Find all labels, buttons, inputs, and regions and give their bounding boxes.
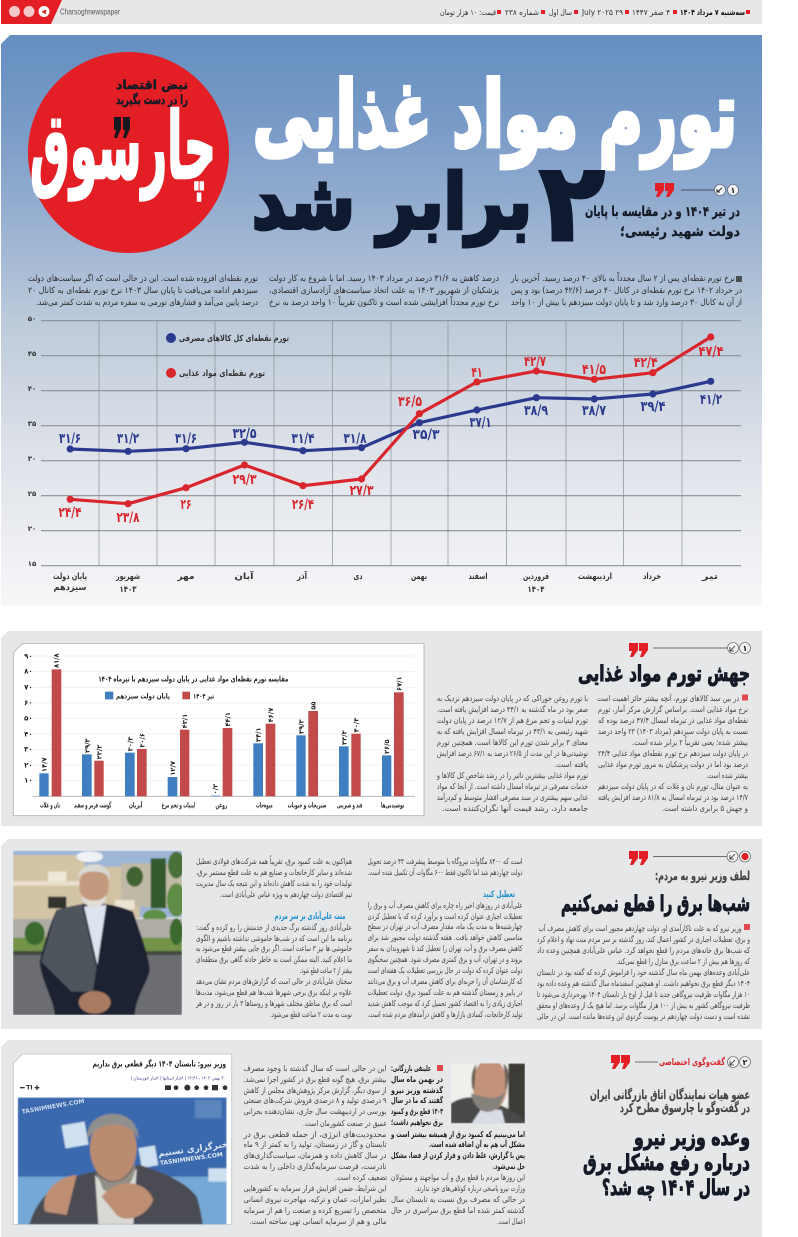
legend: تورم نقطه‌ای مواد غذایی [179, 369, 265, 379]
series: overall inflation: ۳۸/۷ [582, 403, 606, 419]
series: food inflation: ۴۱ [472, 365, 482, 381]
red social tab [1, 0, 62, 24]
series: overall inflation: ۳۲/۵ [232, 426, 257, 442]
section marker [611, 1055, 750, 1069]
issue date line: سال اول [549, 8, 572, 17]
bar value labels: ۳۴/۱ [255, 727, 263, 742]
x axis labels: اسفند [468, 572, 488, 582]
x axis labels: ۱۴۰۳ [120, 585, 137, 595]
bar chart legend: تیر ۱۴۰۴ [193, 692, 214, 700]
logo tagline: نبض اقتصاد [116, 77, 188, 92]
intro text columns: نرخ تورم نقطه‌ای پس از ۲ سال مجدداً به بالای ۴۰ درصد رسید. آخرین بار [510, 271, 735, 284]
panel: lead story with line chart [1, 35, 762, 606]
bar value labels: ۸۱/۸ [53, 653, 61, 668]
issue date line: شماره ۲۳۸ [505, 8, 539, 17]
interview text: اما می‌بینیم که کمبود برق از همیشه بیشتر است و [390, 1130, 525, 1139]
screenshot meta line: ۳۰ بهمن ۱۴۰۳ - ۱۲:۴۶ | اخبار استانها | اخبار خوزستان | [131, 1075, 226, 1081]
intro text columns [28, 271, 742, 308]
headline line two: برابر شد [252, 157, 532, 247]
article text right column: ۱۴/۷ درصد بود در تیرماه امسال به ۸۱/۸ درصد افزایش یافته [598, 793, 749, 802]
series: food inflation: ۴۷/۴ [698, 344, 724, 360]
logo tagline: را در دست بگیرید [116, 92, 188, 107]
bar chart y axis: ۸۰ [24, 668, 33, 676]
interview text: پس با گزارش، غلط دادن و فرار کردن از فضا، مشکل [391, 1150, 525, 1161]
series: overall inflation: ۴۱/۲ [700, 392, 722, 408]
photo: minister outside building [13, 851, 186, 1015]
article text right column: و جهش ۵ برابری داشته است. [662, 804, 748, 813]
bar category labels: روغن [215, 801, 227, 809]
headline line two: ۲ [539, 141, 605, 266]
article text left column: این در حالی است که سال گذشته با وجود مصرف [244, 1063, 386, 1073]
article text left column: متخصص را تسریع کرده و صنعت را هم از سرمایه [244, 1206, 386, 1215]
interview text: علینقی بازرگانی: [391, 1063, 431, 1073]
section marker: ۱ [743, 644, 747, 653]
article text middle column: بروند و در تهران، آب و برق کمتری مصرف شود. همچنین سخنگوی [368, 954, 522, 964]
photo: minister at press backdrop [18, 1097, 229, 1225]
section marker: ۱ [731, 186, 735, 195]
article text left column: برنامه ما این است که در شب‌ها خاموشی نداشته باشیم و الگوی [196, 933, 352, 943]
article text left column: عمیق در صنعت کشورمان است. [303, 1119, 387, 1128]
article text middle column [367, 856, 523, 1019]
bar chart y axis: ۱۰ [24, 777, 33, 785]
article text left column: بورسی در اردیبهشت سال جاری، نشان‌دهنده بحرانی [244, 1107, 386, 1116]
article text left column: تورم لبنیات و تخم مرغ هم از ۱۲/۷ درصد در پایان دولت [437, 716, 588, 725]
series: overall inflation: ۳۱/۴ [292, 431, 315, 447]
bars: end of 13th government [39, 735, 391, 796]
article text left column: تورم مواد غذایی بیشترین تاثیر را در رشد شاخص کل کالاها و [436, 771, 588, 780]
interview text [390, 1059, 525, 1226]
bar category labels: گوشت قرمز و سفید [74, 800, 112, 809]
article text right column: در پایان دولت سیزدهم نرخ تورم نقطه‌ای مواد غذایی ۲۴/۴ [598, 749, 748, 758]
x axis labels: فروردین [523, 572, 549, 582]
series: food inflation: ۲۶ [180, 497, 192, 513]
interview text: ۱۴۰۴ قطع برق و کمبود [391, 1107, 443, 1116]
bar value labels: ۳۹/۳ [297, 719, 305, 734]
kicker [590, 1087, 750, 1115]
series: food inflation: ۴۱/۵ [582, 362, 606, 378]
article text left column: غذایی سهم بیشتری در سبد مصرفی اقشار متوسط و کم‌درآمد [437, 792, 588, 802]
issue date line: قیمت: ۱۰ هزار تومان [440, 8, 496, 17]
article text left column: تضعیف کرده است. [335, 1173, 387, 1182]
article text middle column: که کارشناسان آن را حربه‌ای برای کاهش مصرف آب و برق می‌دانند [368, 976, 523, 986]
bar value labels: ۴۳/۱ [181, 714, 189, 728]
y axis labels: ۳۰ [28, 455, 36, 463]
article text left column: علاوه بر اینکه برق برخی شهرها شب‌ها هم قطع می‌شود، مدت‌ها [196, 988, 352, 997]
issue date line [440, 8, 750, 17]
bar chart legend: پایان دولت سیزدهم [116, 692, 170, 700]
article text left column: تیم اقتصادی دولت چهاردهم به ویژه عباس علی‌آبادی است. [220, 889, 352, 899]
logo quote mark [114, 117, 130, 138]
article text left column: علی‌آبادی روز گذشته برگ جدیدی از خدمتش را رو کرده و گفت: [196, 922, 352, 932]
section marker [655, 183, 738, 197]
interview text: گفتند که ما در سال [391, 1095, 443, 1105]
photo backdrop wording: خبرگزاری تسنیم [157, 1139, 229, 1160]
intro text columns: نرخ تورم مجدداً افزایشی شده است و تاکنون تقریباً ۱۰ واحد درصد به نرخ [269, 295, 499, 308]
article text right column [537, 923, 750, 1021]
bar value labels: ۱۴/۷ [40, 757, 48, 772]
bar category labels: آبزیان [129, 800, 143, 809]
x axis labels: آبان [234, 570, 255, 582]
article text left column: در سال کاهش داده و همزمان، سیاست‌گذاری‌های [244, 1150, 387, 1160]
x axis labels: آذر [296, 570, 308, 582]
article text left column: هم‌اکنون به علت کمبود برق، تقریباً همه شرکت‌های فولادی تعطیل [196, 855, 352, 866]
issue date line: سه‌شنبه ۷ مرداد ۱۴۰۴ [680, 8, 745, 17]
interview text: گذشته وزیر نیرو [390, 1085, 443, 1095]
bar value labels: ۴۶/۷ [267, 708, 275, 722]
section marker: ۲ [743, 1058, 748, 1067]
intro text columns: درصد کاهش به ۳۱/۶ درصد در مرداد ۱۴۰۳ رسید. اما با شروع به کار دولت [269, 274, 499, 284]
x axis labels: شهریور [115, 572, 140, 582]
article text middle column: تعطیل کنید [483, 890, 515, 900]
bar value labels: ۳۰/۶ [138, 733, 146, 748]
subheading: دولت شهید رئیسی؛ [620, 224, 740, 240]
intro text columns: سیزدهم ادامه می‌یافت تا پایان سال ۱۴۰۳ نرخ تورم نقطه‌ای به کانال ۲۰ [28, 286, 258, 296]
bar category labels: لبنیات و تخم مرغ [162, 801, 195, 809]
article text left column [436, 694, 588, 813]
bar value labels: ۵۵ [310, 702, 318, 710]
y axis labels: ۴۰ [28, 385, 36, 393]
interview text: در حالی که مصرف برق نسبت به تابستان سال [391, 1195, 525, 1204]
subheading: در تیر ۱۴۰۴ و در مقایسه با پایان [585, 204, 740, 220]
x axis labels: تیر [701, 572, 718, 582]
article text left column: شده‌اند و سایر کارخانجات و صنایع هم به علت قطع مستمر برق، [196, 868, 352, 877]
y axis labels: ۱۵ [28, 560, 37, 568]
panel: energy minister story [1, 839, 762, 1029]
article text right column [597, 693, 749, 813]
article text left column [195, 855, 352, 1019]
bar value labels: ۳۰/۳ [126, 737, 134, 751]
article text left column: بیشتر از ۲ ساعت قطع شود. [300, 966, 352, 975]
series: overall inflation [59, 378, 722, 455]
issue date line: ۲۹ July ۲۰۲۵ [581, 8, 623, 17]
article text left column: محدودیت‌های انرژی، از جمله قطعی برق در [243, 1130, 386, 1139]
bar chart y axis: ۵۰ [24, 715, 33, 723]
bar category labels: سبزیجات و حبوبات [288, 801, 326, 809]
bar chart y axis: ۶۰ [24, 699, 33, 707]
article text left column: خدمات مصرفی در تیرماه امسال داشته است. از آنجا که مواد [437, 781, 588, 791]
series: food inflation: ۲۶/۴ [292, 497, 314, 513]
article text left column: بیشتر برق، هیچ گونه قطع برق در کشور اجرا نمی‌شد. [244, 1074, 386, 1084]
article text left column: یافته است. [554, 760, 588, 769]
panel: exclusive interview [1, 1040, 762, 1237]
article text left column: تابستان و گاز در زمستان، تولید را به کمتر از ۹ ماه [244, 1139, 386, 1149]
bar chart title: مقایسه تورم نقطه‌ای مواد غذایی در پایان دولت سیزدهم با تیرماه ۱۴۰۴ [98, 675, 289, 684]
photo backdrop wording: TASNIMNEWS.COM [21, 1098, 85, 1116]
intro text columns: در خرداد ۱۴۰۲ نرخ تورم نقطه‌ای در کانال ۴۰ درصد (۴۲/۶ درصد) بود و پس [511, 286, 742, 296]
legend: تورم نقطه‌ای کل کالاهای مصرفی [179, 334, 289, 344]
article text right column: بیشتر شده است. [706, 771, 748, 780]
intro text columns: پزشکیان از شهریور ۱۴۰۳ به علت اتخاذ سیاست‌های آزادسازی اقتصادی، [269, 284, 500, 296]
series: overall inflation: ۳۱/۸ [344, 431, 367, 447]
bars: Tir 1404 [52, 669, 404, 796]
newspaper handle: Charsoghnewspaper [60, 8, 120, 16]
interview text: مشکل آب هم به آن اضافه شده است. [429, 1139, 525, 1149]
article text left column: ۹ درصدی تولید و ۸ درصدی فروش شرکت‌های صنعتی [244, 1096, 386, 1105]
news site screenshot card [13, 1054, 232, 1225]
x axis labels: مهر [176, 572, 194, 582]
issue date line: ۴ صفر ۱۴۴۷ [632, 8, 670, 17]
bar category labels: قند و شیرینی [337, 801, 363, 809]
article text middle column: تعطیلات اجباری عنوان کرده است و برآورد کرده که با تعطیل کردن [368, 911, 522, 921]
article text right column: که روزها هم بیش از ۲ ساعت برق منازل را قطع نمی‌کند. [616, 957, 750, 966]
article text right column: نقطه‌ای مواد غذایی در تیرماه امسال ۴۷/۴ درصد بوده که [598, 716, 748, 725]
logo circle [28, 52, 229, 253]
logo tagline [116, 77, 188, 107]
y axis labels: ۳۵ [28, 420, 37, 428]
series: food inflation: ۲۳/۸ [116, 510, 140, 526]
bar value labels: ۱۲/۷ [169, 761, 177, 776]
intro text columns: تورم نقطه‌ای افزوده شده است. این در حالی است که اگر سیاست‌های دولت [28, 273, 259, 284]
bar chart y axis: ۹۰ [24, 652, 33, 660]
article text left column: سخنان علی‌آبادی در حالی است که گزارش‌های مردم نشان می‌دهد [196, 976, 352, 986]
screenshot share icons [20, 1085, 227, 1092]
article text left column: منت علی‌آبادی بر سر مردم [274, 910, 346, 922]
section marker [629, 851, 750, 865]
y axis labels: ۴۵ [28, 350, 37, 358]
article text left column: تولیدات خود را به شدت کاهش داده‌اند و این نتیجه یک سال مدیریت [196, 879, 352, 888]
bar value labels: ۲۳/۲ [95, 745, 103, 759]
y axis labels: ۲۰ [28, 525, 36, 533]
article text left column [243, 1063, 387, 1226]
chart grid [41, 321, 741, 566]
x axis labels: اردیبهشت [578, 572, 612, 582]
series: overall inflation: ۳۸/۹ [524, 403, 548, 419]
article text middle column: است که ۸۴۰۰ مگاوات نیروگاه با متوسط پیشرفت ۴۳ درصد تحویل [368, 856, 522, 866]
article text left column: صفر بود در ماه گذشته به ۴۴/۱ درصد افزایش یافته است. [437, 704, 588, 714]
series: food inflation: ۳۶/۵ [398, 394, 422, 410]
series: overall inflation: ۳۹/۴ [640, 399, 666, 415]
article text left column: از سوی دیگر، گزارش مرکز پژوهش‌های مجلس از کاهش [244, 1085, 386, 1095]
series: overall inflation: ۳۱/۶ [175, 431, 197, 447]
bar chart y axis: ۳۰ [24, 746, 33, 754]
article text right column: ظرفیت نیروگاهی کشور به بیش از ۱۰۰ هزار مگاوات برسد. اما هیچ یک از وعده‌های او محقق [537, 1000, 750, 1010]
logo circle: چارسوق [30, 93, 216, 201]
section marker [629, 642, 750, 657]
section marker: گفت‌وگوی اختصاصی [659, 1056, 725, 1068]
article text left column: این شرایط، ضمن افزایش فرار سرمایه به کشورهایی [244, 1184, 386, 1193]
article text right column: درصد بود اما در دولت پزشکیان به مرور تورم مواد غذایی [598, 760, 748, 769]
x axis labels: دی [354, 572, 363, 582]
interview text: برق نخواهیم داشت؛ [391, 1118, 443, 1127]
photo backdrop wording: TASNIMNEWS.COM [160, 1151, 223, 1167]
article text left column: نظیر امارات، عمان و ترکیه، مهاجرت نیروی انسانی [244, 1195, 386, 1204]
article text left column: است که برق مناطق مختلف شهرها و روستاها ۳ بار در روز و در هر [195, 999, 352, 1008]
interview text: حل نمی‌شود. [493, 1162, 525, 1171]
bar value labels: ۲۶/۵ [383, 739, 391, 754]
x axis labels: بهمن [411, 572, 427, 582]
article text right column: نسبت به پایان دولت سیزدهم (مرداد ۱۴۰۳) ۲۳ واحد درصد [598, 727, 748, 736]
bar chart legend [105, 692, 214, 700]
subheading [585, 204, 740, 240]
intro text columns: از آن به کانال ۳۰ درصد وارد شد و تا پایان دولت سیزدهم با بیش از ۱۰ واحد [511, 296, 742, 308]
bar category labels [40, 800, 405, 809]
interview text: این روزها مردم با قطع برق و آب مواجهند و مسئولان [391, 1172, 525, 1182]
series: food inflation: ۴۲/۴ [634, 355, 658, 371]
interview text: اعمال است. [497, 1217, 525, 1226]
article text right column: بیشتر شده؛ یعنی تقریباً ۲ برابر شده است. [632, 736, 748, 747]
photo backdrop wording [21, 1098, 229, 1167]
heading: وعده وزیر نیرو [633, 1126, 750, 1151]
bar chart y axis: ۴۰ [24, 730, 33, 738]
article text middle column: علی‌آبادی در روزهای اخیر راه چاره برای کاهش مصرف آب و برق را [368, 900, 522, 910]
bar chart y axis: ۲۰ [24, 761, 33, 769]
article text left column: نوبت به مدت ۲ ساعت قطع می‌شود. [270, 1010, 352, 1019]
bar chart y axis: ۷۰ [24, 684, 33, 692]
interview text: وزارت نیرو پاسخی درباره کوتاهی‌های خود ندارند. [415, 1184, 525, 1193]
article text left column: شهید رئیسی به ۴۳/۱ در تیرماه امسال افزایش یافته که به [437, 727, 588, 736]
article text middle column: مناسبی کاهش خواهد یافت. هفته گذشته دولت مجبور شد برای [368, 932, 522, 942]
bar value labels: ۰/۲ [212, 784, 220, 794]
y axis labels [28, 315, 37, 568]
headline line two [252, 141, 605, 266]
article text right column: در بین سبد کالاهای تورم، آنچه بیشتر حائز اهمیت است [597, 693, 739, 703]
article text middle column: چهارشنبه‌ها به مدت یک ماه، مقدار مصرف آب در تهران در سطح [368, 921, 523, 931]
series: food inflation: ۲۷/۳ [350, 483, 374, 499]
article text left column: ما اعلام کنید. البته ممکن است به خاطر حادثه گاهی برق منطقه‌ای [196, 954, 352, 964]
y axis labels: ۲۵ [28, 490, 37, 498]
article text middle column: تولید کارخانجات، کسادی بازارها و کاهش درآمدهای مردم شده است. [368, 1009, 522, 1019]
article text right column: نرخ مواد غذایی است. براساس گزارش مرکز آمار، تورم [598, 704, 748, 714]
bar value labels: ۳۳/۳ [340, 730, 348, 745]
article text left column: نوشیدنی‌ها در این مدت از ۲۶/۵ درصد به ۶۷/۱ درصد افزایش [437, 749, 588, 758]
intro text columns: درصد پایین می‌آمد و فشارهای تورمی به سفره مردم به شدت کمتر می‌شد. [36, 296, 258, 308]
article text left column: مالی و هم از سرمایه انسانی تهی ساخته است. [250, 1217, 386, 1226]
screenshot share icons: Tl [26, 1085, 33, 1092]
series: overall inflation: ۳۵/۳ [412, 427, 440, 443]
bar value labels: ۲۹/۳ [83, 738, 91, 753]
article text left column: جامعه دارد، رشد قیمت آنها نگران‌کننده است. [442, 803, 588, 813]
bar category labels: نان و غلات [40, 801, 60, 809]
article text left column: خاموشی ها نیز ۳ ساعت است. اگر برق جایی بیشتر قطع می‌شود به [196, 943, 352, 953]
interview text: در بهمن ماه سال [391, 1075, 443, 1084]
x axis labels [53, 570, 718, 595]
series: overall inflation: ۳۱/۶ [59, 431, 81, 447]
bar value labels: ۶۷/۱ [395, 676, 403, 691]
series: food inflation: ۲۴/۴ [58, 505, 82, 521]
article text middle column: دولت عنوان کرده که دولت در حال بررسی تعطیلات یک هفته‌ای است [368, 966, 523, 975]
article text right column: به عنوان مثال، تورم نان و غلات که در پایان دولت سیزدهم [598, 782, 748, 791]
bar category labels: نوشیدنی‌ها [381, 801, 405, 809]
article text left column: نادرست، فرصت سرمایه‌گذاری داخلی را به شدت [244, 1161, 386, 1171]
screenshot headline: وزیر نیرو: تابستان ۱۴۰۴ دیگر قطعی برق نداریم [93, 1058, 226, 1069]
x axis labels: سیزدهم [54, 583, 86, 593]
article text middle column: اجباری زیادی را به اقتصاد کشور تحمیل کرد که موجب کاهش شدید [368, 999, 522, 1008]
heading [583, 1126, 750, 1201]
line chart [28, 315, 741, 595]
x axis labels: پایان دولت [53, 572, 87, 582]
bar value labels: ۴۰/۳ [352, 718, 360, 732]
series: food inflation: ۴۲/۷ [524, 354, 546, 370]
bar chart grid [33, 656, 415, 781]
bar chart card [13, 643, 424, 816]
x axis labels: خرداد [643, 572, 661, 582]
series: food inflation: ۲۹/۳ [232, 472, 257, 488]
series: overall inflation: ۳۷/۱ [470, 415, 492, 431]
heading: در سال ۱۴۰۴ چه شد؟ [602, 1176, 750, 1201]
x axis labels: ۱۴۰۴ [528, 585, 544, 595]
panel: food inflation jump [1, 631, 762, 826]
article text middle column: کاهش مصرف برق و آب، تهران را تعطیل کند تا شهروندان به سفر [367, 943, 523, 953]
bar value labels: ۴۴/۱ [224, 712, 232, 727]
legend [166, 333, 289, 379]
interview text: گذشته کمتر شده اما قطع برق سراسری در حال [391, 1205, 525, 1215]
y axis labels: ۵۰ [28, 315, 36, 323]
bar chart y axis [24, 652, 33, 785]
bar value labels [40, 653, 403, 794]
article text left column: با تورم روغن خوراکی که در پایان دولت سیزدهم نزدیک به [437, 694, 588, 703]
article text middle column: دولت چهاردهم شد اما تاکنون فقط ۶۰۰ مگاوات آن تکمیل شده است. [368, 867, 523, 877]
bar category labels: میوه‌جات [256, 801, 273, 809]
article text middle column: در پاییز و زمستان گذشته هم به علت کمبود برق، دولت تعطیلات [368, 987, 523, 997]
portrait [451, 1059, 525, 1123]
series: food inflation [58, 333, 724, 526]
series: overall inflation: ۳۱/۲ [117, 431, 139, 447]
masthead bar [1, 0, 762, 24]
article text left column: معنای ۳ برابر شدن تورم این کالاها است. همچنین تورم [437, 738, 588, 747]
